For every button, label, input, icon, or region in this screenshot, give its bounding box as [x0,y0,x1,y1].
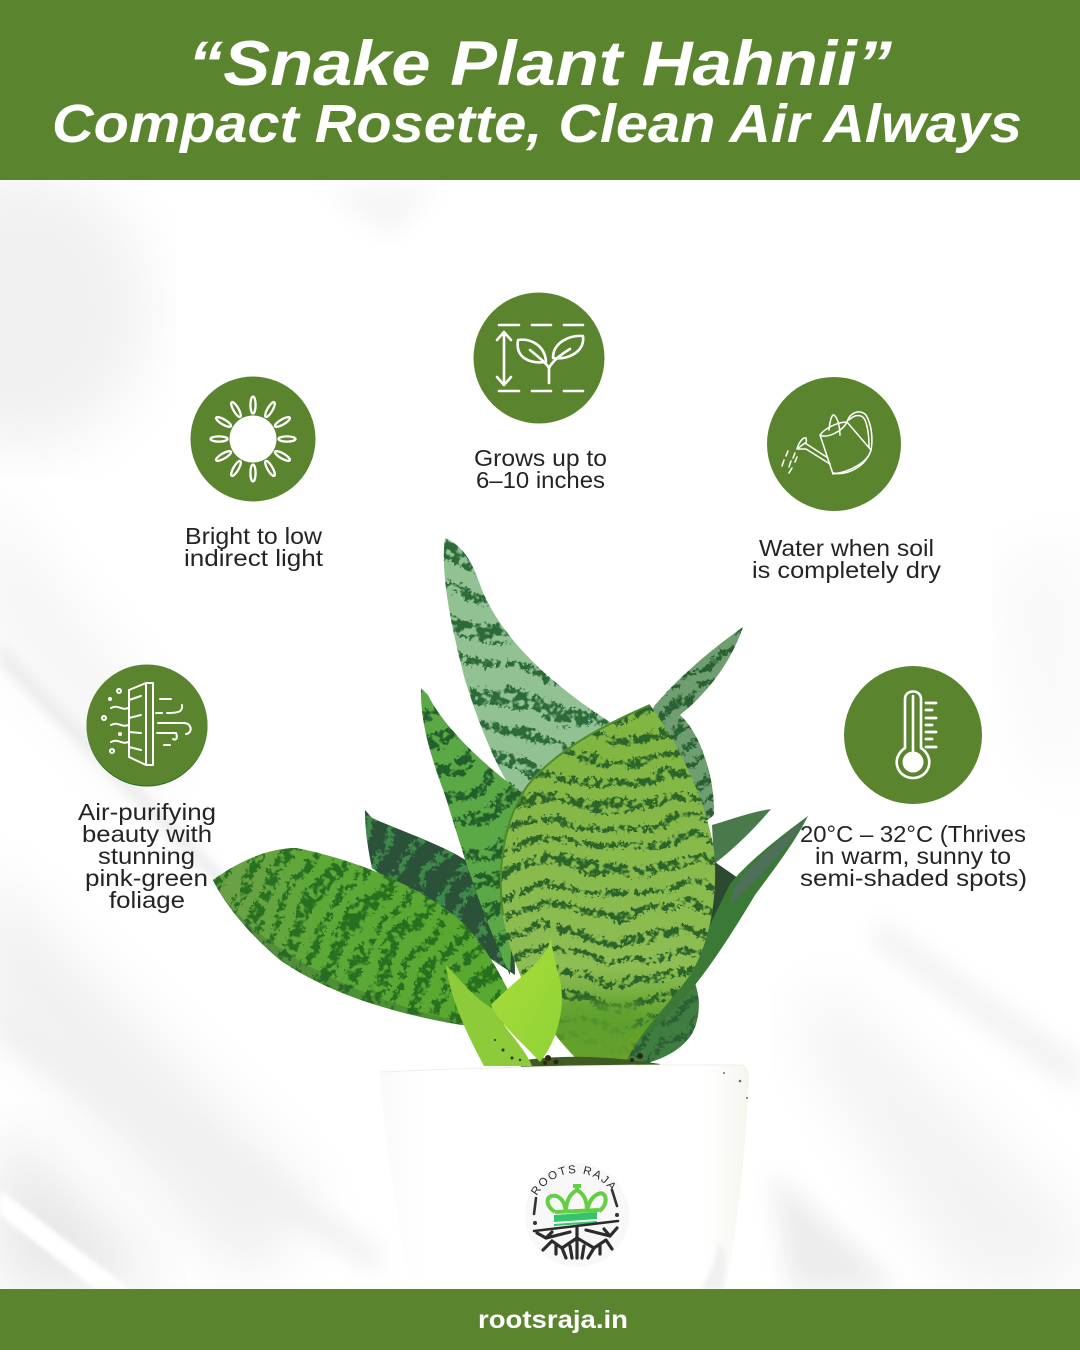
water label: is completely dry [752,557,941,583]
crown [548,1184,606,1212]
air label: Air-purifying [78,799,216,825]
dark shadow behind right side [670,860,738,985]
young lime leaf right [491,937,562,1062]
dark back leaf [365,810,515,975]
big left leaf [213,848,508,1026]
soil and base [520,1057,660,1068]
feature: water [752,377,941,583]
water label [752,535,941,583]
right small leaf [712,809,771,864]
icon: watering can [767,377,901,511]
brand logo sticker [530,1165,620,1260]
height label [474,445,607,493]
back right thin leaf [652,627,743,820]
air label [78,799,216,913]
young lime leaf left [446,965,532,1066]
logo side marks [533,1190,619,1225]
temperature label [800,821,1027,891]
icon: sun [190,376,316,502]
feature: temperature [800,666,1027,891]
light label: indirect light [184,545,324,571]
feature: height [474,292,607,493]
height label: 6–10 inches [476,467,605,493]
temperature label: in warm, sunny to [815,843,1011,869]
roots [534,1221,618,1258]
footer band [0,1289,1080,1350]
lower right back leaf [627,984,699,1062]
tall back leaf [444,538,610,793]
icon: plant height [474,292,604,424]
air label: beauty with [82,821,212,847]
water label: Water when soil [759,535,934,561]
temperature label: semi-shaded spots) [800,865,1027,891]
main front leaf [502,705,716,1060]
plant illustration [180,510,808,1080]
website: rootsraja.in [478,1306,628,1334]
light label [184,523,324,571]
air label: foliage [109,887,185,913]
temperature label: 20°C – 32°C (Thrives [800,821,1026,847]
crown band [554,1212,597,1226]
right lower thin leaf [622,816,808,1050]
upper left leaf [420,688,522,975]
main leaf edge [501,705,650,915]
title line 2: Compact Rosette, Clean Air Always [52,94,1022,154]
pot [380,1064,748,1289]
feature: air purifying [78,664,216,913]
logo text: ROOTS RAJA [530,1165,615,1196]
air label: stunning [98,843,195,869]
icon: air filter [86,664,208,786]
air label: pink-green [85,865,208,891]
header band [0,0,1080,180]
icon: thermometer [844,666,982,804]
height label: Grows up to [474,445,607,471]
feature: light [184,376,324,571]
title line 1: “Snake Plant Hahnii” [188,29,893,99]
light label: Bright to low [185,523,323,549]
soil specks [543,1053,643,1065]
